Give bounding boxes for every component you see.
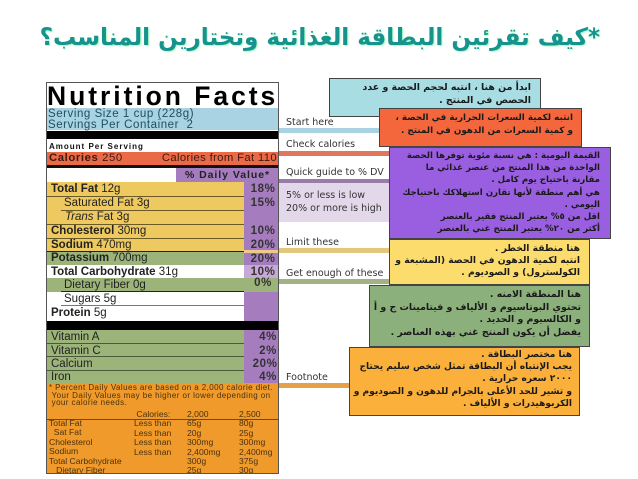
footnote panel	[47, 383, 279, 475]
row line	[61, 305, 244, 306]
callout: start here: ابدأ من هنا ، انتبه لحجم الحصة و عدد	[363, 82, 531, 93]
calories row	[47, 152, 279, 165]
callout: start here: الحصص في المنتج .	[439, 95, 531, 106]
value: calcium: 20%	[253, 358, 277, 370]
footnote text: your calorie needs.	[52, 398, 127, 407]
table column: 2000: 65g	[187, 418, 201, 428]
calories row: Calories 250	[49, 152, 123, 164]
nutrient: sugars: Sugars 5g	[64, 293, 116, 305]
row line	[47, 238, 244, 239]
callout: footnote: الكربوهيدرات و الألياف .	[463, 399, 572, 409]
amount per serving: Amount Per Serving	[49, 142, 144, 151]
table column: 2000: 300mg	[187, 437, 213, 447]
bar: footnote	[279, 383, 349, 388]
panel: percent guide	[279, 183, 389, 222]
callout: get enough: يفضل أن يكون المنتج غني بهذه العناصر .	[391, 326, 581, 338]
table column: nutrient	[49, 418, 122, 474]
table column: 2500: 375g	[239, 456, 258, 466]
footnote text	[49, 383, 273, 407]
bar: get enough	[279, 279, 389, 284]
total carbohydrate daily cell	[244, 265, 279, 278]
table column: nutrient: Sat Fat	[54, 427, 81, 437]
table column: nutrient: Total Carbohydrate	[49, 456, 122, 466]
table column: 2500: 2,400mg	[239, 447, 272, 457]
value: iron: 4%	[259, 371, 277, 383]
table column: limits: Less than	[134, 447, 171, 457]
label: quick guide: Quick guide to % DV	[286, 167, 384, 178]
nutrient: iron: Iron	[51, 371, 71, 383]
row line	[47, 196, 244, 197]
table rule	[47, 419, 279, 420]
nutrient: trans fat: Trans Fat 3g	[65, 211, 129, 223]
nutrient: potassium: Potassium 700mg	[51, 252, 148, 264]
row line	[61, 210, 244, 211]
table column: nutrient: Total Fat	[49, 418, 82, 428]
nutrient: calcium: Calcium	[51, 358, 93, 370]
table column: 2000	[187, 409, 220, 474]
callout: daily value: مقارنة باحتياج يوم كامل .	[491, 175, 600, 185]
table column: nutrient: Sodium	[49, 446, 78, 456]
thick divider	[47, 131, 279, 139]
footnote table	[47, 409, 278, 474]
table column: 2000: 20g	[187, 428, 201, 438]
table column: nutrient: Cholesterol	[49, 437, 92, 447]
callout: daily value: هي أهم منطقة لأنها تقارن استهلاكك باحتياجك	[403, 188, 600, 198]
table column: 2500: 25g	[239, 428, 253, 438]
callout: get enough	[369, 285, 590, 347]
value: total fat: 18%	[251, 183, 275, 195]
callout: footnote: هنا مختصر البطاقة .	[481, 350, 572, 360]
table column: limits: Less than	[134, 418, 171, 428]
callout: get enough: هنا المنطقة الامنه .	[490, 289, 581, 300]
callout: calories: انتبه لكمية السعرات الحرارية في الحصة ،	[395, 113, 573, 123]
row line	[61, 291, 244, 292]
row line	[47, 370, 244, 371]
table column: 2500	[239, 409, 272, 474]
nutrient: total fat: Total Fat 12g	[51, 183, 120, 195]
value: vitamin a: 4%	[259, 331, 277, 343]
sodium highlight stripe	[244, 250, 279, 253]
panel: percent guide: 5% or less is low	[286, 190, 365, 201]
value: potassium: 20%	[251, 253, 275, 265]
value: vitamin c: 2%	[259, 345, 277, 357]
callout: limit	[389, 239, 590, 285]
nutrient: protein: Protein 5g	[51, 307, 107, 319]
potassium row background	[47, 252, 244, 265]
callout: limit: هنا منطقة الخطر .	[495, 243, 580, 254]
value: total carbohydrate: 10%	[251, 266, 275, 278]
thick divider 2	[47, 321, 279, 330]
callout: start here	[329, 78, 541, 117]
dietary fiber row background	[47, 278, 279, 292]
callout: footnote	[349, 347, 580, 416]
footnote text: Your Daily Values may be higher or lower depending on	[52, 390, 270, 400]
table column: 2000: 2,000	[187, 409, 209, 419]
bar: start here	[279, 128, 379, 133]
bar: limit these	[279, 248, 389, 253]
label: limit these: Limit these	[286, 237, 339, 248]
callout: get enough: تحتوي البوتاسيوم و الألياف و فيتامينات ج و أ	[374, 302, 581, 312]
callout: daily value: القيمة اليومية : هي نسبة مئوية توفرها الحصة	[407, 151, 600, 161]
daily value column	[244, 182, 279, 383]
callout: calories	[379, 108, 582, 147]
divider	[47, 165, 279, 168]
panel: percent guide: 20% or more is high	[286, 202, 382, 214]
table column: 2000: 2,400mg	[187, 447, 220, 457]
table column: limits: Calories:	[136, 409, 170, 419]
serving information	[47, 108, 279, 130]
callout: daily value: اقل من ٥% يعتبر المنتج فقير بالعنصر	[441, 212, 600, 222]
nutrient: dietary fiber: Dietary Fiber 0g	[64, 279, 146, 291]
callout: daily value: أكثر من ٢٠% يعتبر المنتج غني بالعنصر	[438, 224, 600, 234]
callout: daily value	[389, 147, 611, 239]
nutrient: cholesterol: Cholesterol 30mg	[51, 225, 146, 237]
row line	[47, 251, 244, 252]
protein column cell	[244, 292, 279, 321]
nutrition facts label	[46, 82, 279, 474]
bar: check calories	[279, 151, 389, 156]
callout: daily value: اليومي .	[565, 200, 600, 210]
footnote text: * Percent Daily Values are based on a 2,000 calorie diet.	[49, 383, 273, 392]
nutrient: total carbohydrate: Total Carbohydrate 31g	[51, 266, 178, 278]
table column: 2500: 300mg	[239, 437, 265, 447]
table column: limits: Less than	[134, 437, 171, 447]
serving information: Serving Size 1 cup (228g)	[48, 108, 194, 120]
nutrient: vitamin c: Vitamin C	[51, 345, 101, 357]
label: start here: Start here	[286, 117, 334, 128]
value: cholesterol: 10%	[251, 225, 275, 237]
value: sodium: 20%	[251, 239, 275, 251]
daily value header: % Daily Value*	[185, 169, 270, 181]
table column: 2500: 2,500	[239, 409, 261, 419]
table column: limits	[134, 409, 171, 457]
table column: 2000: 300g	[187, 456, 206, 466]
row line	[47, 356, 244, 357]
callout: footnote: و تشير للحد الأعلى بالجرام للدهون و الصوديوم و	[354, 387, 572, 397]
serving information: Servings Per Container 2	[48, 118, 193, 130]
callout: get enough: و الكالسيوم و الحديد .	[480, 314, 581, 325]
limit these rows	[47, 182, 244, 252]
callout: footnote: يجب الإنتباه أن البطاقة تمثل شخص سليم يحتاج	[359, 362, 572, 372]
label: footnote: Footnote	[286, 372, 328, 383]
title: *كيف تقرئين البطاقة الغذائية وتختارين المناسب؟	[40, 23, 600, 51]
callout: daily value: الواحدة من هذا المنتج من عنصر غذائي ما	[426, 163, 600, 173]
callout: calories: و كمية السعرات من الدهون في المنتج .	[401, 126, 573, 136]
table column: limits: Less than	[134, 428, 171, 438]
bar: quick guide	[279, 179, 389, 183]
vitamins background	[47, 330, 244, 383]
nutrient: sodium: Sodium 470mg	[51, 239, 132, 251]
callout: footnote: ٢٠٠٠ سعره حرارية .	[482, 374, 572, 384]
callout: limit: الكولسترول) و الصوديوم .	[461, 267, 580, 278]
row line	[47, 224, 244, 225]
nutrient: saturated fat: Saturated Fat 3g	[64, 197, 150, 209]
label: get enough: Get enough of these	[286, 268, 383, 279]
callout: limit: انتبه لكمية الدهون في الحصة (المشبعة و	[395, 255, 580, 266]
value: saturated fat: 15%	[251, 197, 275, 209]
table column: 2500: 80g	[239, 418, 253, 428]
label: check calories: Check calories	[286, 139, 355, 150]
calories row: Calories from Fat 110	[162, 152, 277, 164]
nutrient: vitamin a: Vitamin A	[51, 331, 99, 343]
row line	[47, 343, 244, 344]
